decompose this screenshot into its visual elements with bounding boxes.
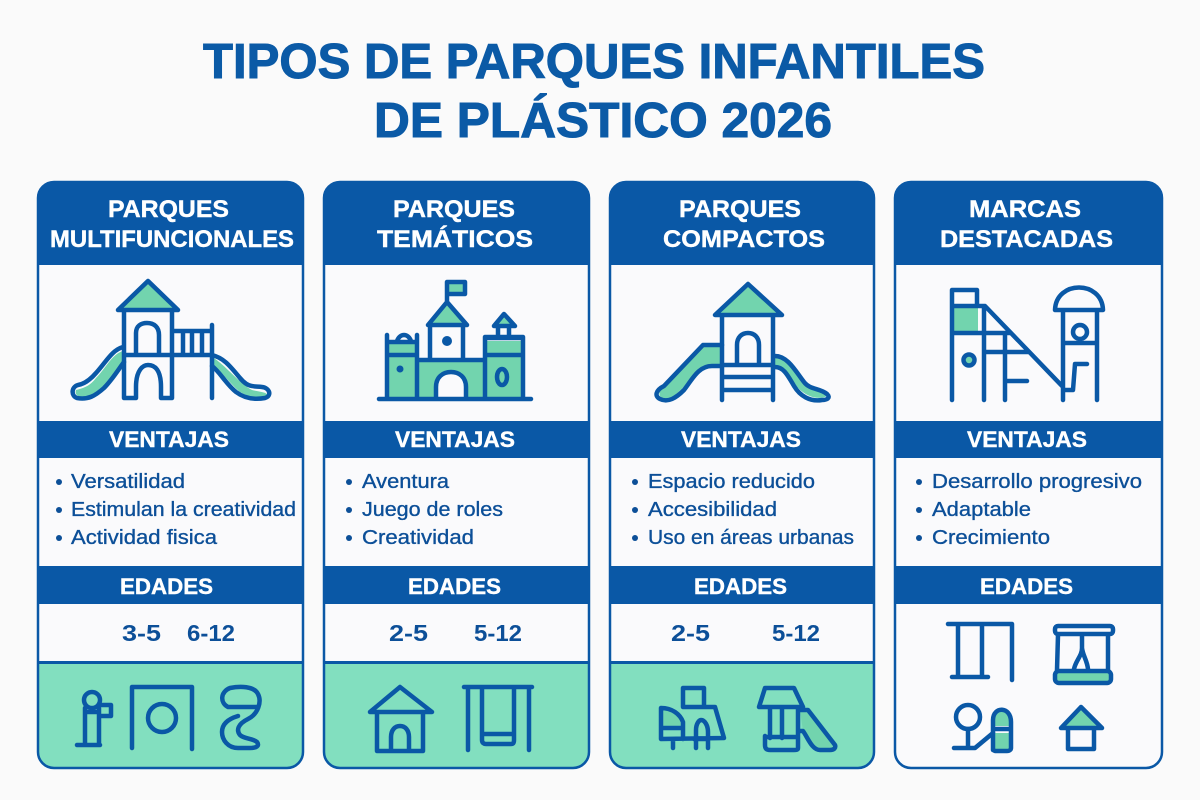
panel: parques temáticos bbox=[324, 182, 589, 768]
heading: parques compactos: PARQUES bbox=[679, 196, 801, 223]
icons: marcas bbox=[948, 624, 1113, 751]
heading: parques compactos: COMPACTOS bbox=[663, 226, 825, 253]
heading: parques multifuncionales bbox=[50, 196, 294, 253]
icons: casita y columpio bbox=[370, 687, 532, 751]
list: ventajas: Uso en áreas urbanas bbox=[648, 527, 854, 549]
icons: mini parque y tobogán bbox=[661, 688, 835, 750]
heading: ventajas: VENTAJAS bbox=[109, 427, 229, 452]
ages: 5-12 bbox=[772, 620, 820, 646]
list: ventajas: Accesibilidad bbox=[648, 499, 777, 521]
list: ventajas: Creatividad bbox=[362, 527, 474, 549]
heading: ventajas: VENTAJAS bbox=[395, 427, 515, 452]
icon: torre compacta con toboganes bbox=[657, 284, 829, 400]
list: ventajas: Desarrollo progresivo bbox=[932, 471, 1142, 493]
panel: marcas destacadas bbox=[895, 182, 1162, 768]
list: ventajas: Actividad fisica bbox=[71, 527, 218, 549]
list: ventajas bbox=[346, 471, 503, 549]
list: ventajas: Estimulan la creatividad bbox=[71, 499, 296, 521]
list: ventajas: Espacio reducido bbox=[648, 471, 815, 493]
panel: parques compactos bbox=[610, 182, 874, 768]
heading: parques compactos bbox=[663, 196, 825, 253]
icon: estructura con torre y rampa bbox=[952, 288, 1103, 400]
list: ventajas: Aventura bbox=[362, 471, 450, 493]
ages: 2-5 bbox=[671, 620, 710, 646]
ages bbox=[122, 620, 235, 646]
ages: 6-12 bbox=[187, 620, 235, 646]
heading: edades: EDADES bbox=[120, 574, 213, 599]
heading: ventajas: VENTAJAS bbox=[967, 427, 1087, 452]
ages: 5-12 bbox=[474, 620, 522, 646]
heading: ventajas: VENTAJAS bbox=[681, 427, 801, 452]
heading: marcas destacadas bbox=[940, 196, 1113, 253]
ages bbox=[671, 620, 820, 646]
icon: torre con dos toboganes bbox=[73, 281, 269, 399]
ages: 2-5 bbox=[389, 620, 428, 646]
heading: parques multifuncionales: PARQUES bbox=[108, 196, 229, 223]
list: ventajas bbox=[916, 471, 1142, 549]
heading: marcas destacadas: MARCAS bbox=[969, 196, 1081, 223]
title bbox=[203, 35, 985, 148]
heading: parques temáticos bbox=[377, 196, 533, 253]
panel: parques multifuncionales bbox=[38, 182, 303, 768]
ages bbox=[389, 620, 522, 646]
heading: parques multifuncionales: MULTIFUNCIONALES bbox=[50, 226, 294, 253]
heading: edades: EDADES bbox=[694, 574, 787, 599]
heading: edades: EDADES bbox=[980, 574, 1073, 599]
icon: castillo bbox=[379, 282, 531, 399]
list: ventajas bbox=[632, 471, 854, 549]
list: ventajas bbox=[56, 471, 296, 549]
icons: equipamiento bbox=[77, 687, 260, 749]
list: ventajas: Adaptable bbox=[932, 499, 1031, 521]
heading: parques temáticos: TEMÁTICOS bbox=[377, 225, 533, 253]
heading: edades: EDADES bbox=[408, 574, 501, 599]
list: ventajas: Crecimiento bbox=[932, 527, 1050, 549]
list: ventajas: Juego de roles bbox=[362, 499, 503, 521]
title: TIPOS DE PARQUES INFANTILES bbox=[203, 35, 985, 89]
title: DE PLÁSTICO 2026 bbox=[374, 94, 832, 148]
heading: parques temáticos: PARQUES bbox=[393, 196, 515, 223]
heading: marcas destacadas: DESTACADAS bbox=[940, 226, 1113, 253]
ages: 3-5 bbox=[122, 620, 161, 646]
list: ventajas: Versatilidad bbox=[71, 471, 185, 493]
